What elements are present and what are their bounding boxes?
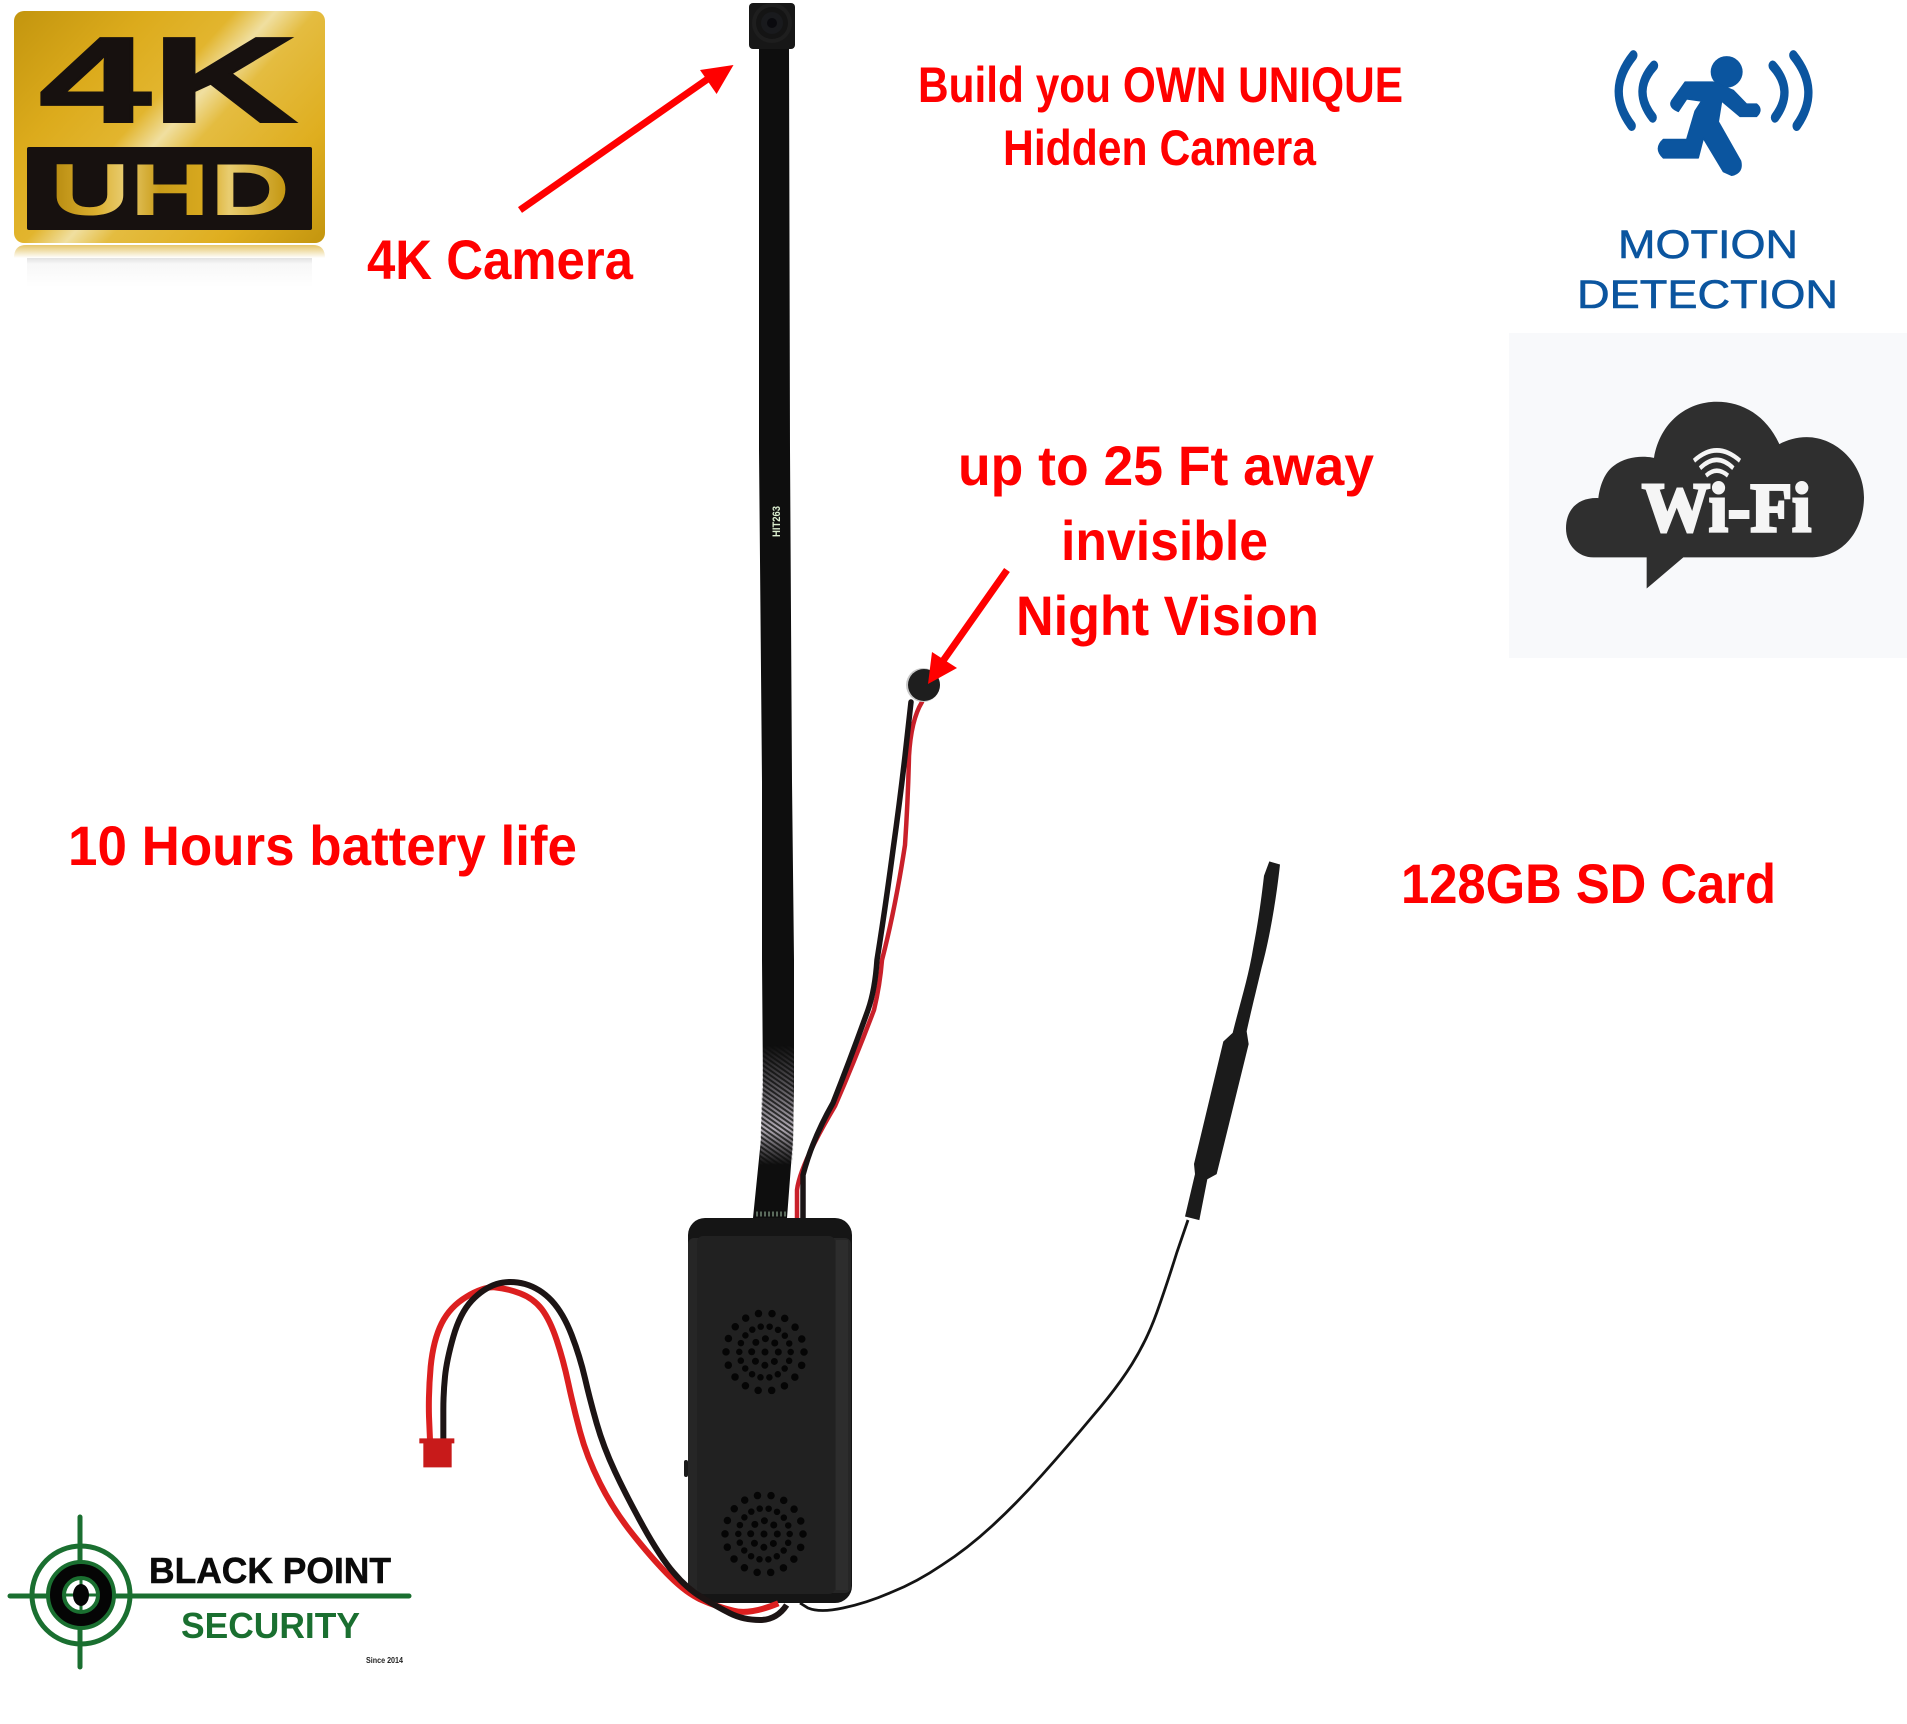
label: night vision: Night Vision <box>1016 584 1319 647</box>
red wire <box>429 1287 778 1612</box>
panel: Wi-Fi <box>1509 333 1907 658</box>
icon: motion detection <box>1577 55 1838 317</box>
arrow: to night vision LED <box>928 570 1007 684</box>
main unit box <box>684 1218 852 1603</box>
badge text: UHD: UHD <box>50 150 290 231</box>
badge text: 4K: 4K <box>39 12 297 148</box>
ribbon end texture <box>756 1212 786 1216</box>
icon: running figure with waves <box>1619 55 1808 175</box>
logo: Black Point Security <box>10 1517 409 1667</box>
label: battery life: 10 Hours battery life <box>68 814 577 877</box>
IR night vision LED <box>906 668 940 702</box>
panel background <box>1509 333 1907 658</box>
badge: 4K UHD <box>14 11 325 287</box>
box right strip <box>836 1240 848 1590</box>
box left and right bevel <box>688 1238 851 1593</box>
label: night vision: invisible <box>1061 509 1268 572</box>
logo text: since: Since 2014 <box>366 1656 403 1665</box>
logo target mark <box>10 1517 409 1667</box>
badge black strip <box>27 147 312 230</box>
text: Wi-Fi: Wi-Fi <box>1642 470 1811 547</box>
label: night vision: up to 25 Ft away <box>958 434 1374 497</box>
red connector <box>419 1438 454 1467</box>
camera lens head <box>749 3 795 49</box>
label: SD card: 128GB SD Card <box>1401 852 1776 915</box>
ribbon shine <box>760 1045 794 1165</box>
power lead with connector <box>419 1282 787 1620</box>
arrow: to camera lens <box>520 65 734 210</box>
text: DETECTION: DETECTION <box>1577 273 1838 317</box>
box shell <box>688 1218 852 1603</box>
logo text: BLACK POINT: BLACK POINT <box>149 1550 391 1591</box>
speaker grille bottom <box>725 1495 803 1573</box>
badge reflection <box>14 245 325 287</box>
antenna body <box>1185 861 1280 1220</box>
text: MOTION: MOTION <box>1618 223 1798 267</box>
logo text: SECURITY: SECURITY <box>181 1605 360 1646</box>
label: night vision <box>958 434 1374 647</box>
heading: build your own <box>918 57 1403 176</box>
antenna <box>800 861 1280 1610</box>
heading: build your own: Build you OWN UNIQUE <box>918 57 1403 113</box>
side button <box>684 1460 688 1477</box>
antenna wire <box>800 1220 1188 1610</box>
badge gold plate <box>14 11 325 243</box>
camera ribbon cable <box>753 40 794 1218</box>
box front face <box>697 1236 835 1594</box>
heading: build your own: Hidden Camera <box>1003 120 1317 176</box>
speaker grille top <box>726 1313 804 1391</box>
microphone wires <box>797 702 922 1218</box>
ribbon print: HIT263 <box>771 506 783 537</box>
icon: cloud with speech tail <box>1566 402 1864 589</box>
label: 4K Camera: 4K Camera <box>367 228 634 291</box>
black wire <box>443 1282 787 1620</box>
